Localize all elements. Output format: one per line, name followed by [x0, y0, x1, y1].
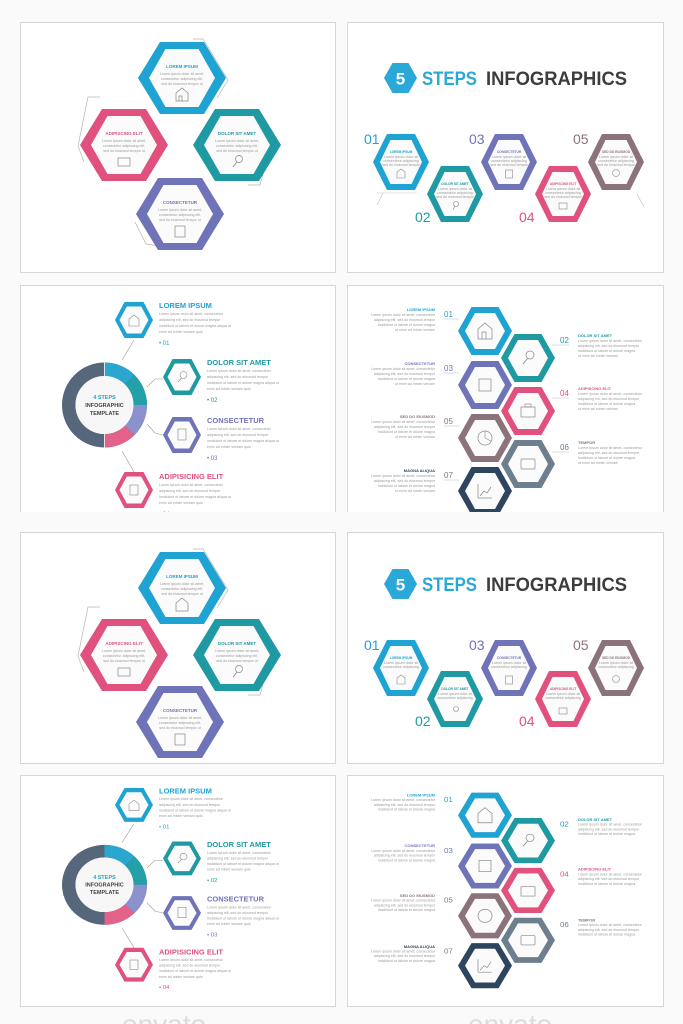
step 05: 05 — [573, 131, 589, 147]
step 06: Lorem ipsum dolor sit amet, consectetur — [578, 923, 643, 927]
step 04: 04 — [519, 209, 535, 225]
step 04 adipiscing elit: • 04 — [159, 512, 170, 518]
step 01: Lorem ipsum dolor sit — [384, 661, 418, 665]
step 05: Lorem ipsum dolor sit amet, consectetur — [371, 899, 436, 903]
title: STEPS — [422, 69, 477, 90]
step 02: Lorem ipsum dolor sit amet, consectetur — [578, 339, 643, 343]
step 06: Lorem ipsum dolor sit amet, consectetur — [578, 446, 643, 450]
step 01: LOREM IPSUM — [407, 793, 435, 797]
title: 5 — [396, 70, 405, 88]
title: 5 — [396, 576, 405, 594]
step 02: 02 — [415, 713, 431, 729]
step 01 — [364, 131, 429, 190]
step 05: Lorem ipsum dolor sit — [599, 661, 633, 665]
step 04 — [519, 166, 591, 225]
step 04: incididunt ut labore et dolore magna aliqua ut — [159, 969, 231, 973]
panel: 7 steps vertical hexagons (row 2 right) — [348, 286, 664, 526]
hex: lorem ipsum: consectetur adipiscing elit, — [161, 587, 203, 591]
step 02: 02 — [560, 820, 569, 828]
hex: adipiscing elit (left) — [80, 109, 168, 181]
step 03: 03 — [444, 364, 453, 373]
step 04: Lorem ipsum dolor sit amet, consectetur — [578, 392, 643, 396]
step 05: consectetur adipiscing — [598, 159, 634, 163]
step 01: adipiscing elit, sed do eiusmod tempor — [374, 318, 436, 322]
hex: adipiscing elit: Lorem ipsum dolor sit amet, — [102, 649, 146, 653]
step 07 — [371, 467, 512, 515]
step 01 lorem ipsum: adipiscing elit, sed do eiusmod tempor — [159, 318, 221, 322]
step 01 — [371, 307, 512, 355]
step 03: sed do eiusmod tempor — [490, 163, 529, 167]
step 02: Lorem ipsum dolor sit amet, consectetur — [578, 823, 643, 827]
step 01: consectetur adipiscing — [383, 665, 419, 669]
step 07: 07 — [444, 947, 453, 955]
step 07: 07 — [444, 471, 453, 480]
step 03: Lorem ipsum dolor sit — [492, 155, 526, 159]
step 01: incididunt ut labore et dolore magna — [378, 808, 435, 812]
step 03 consectetur: enim ad minim veniam quis — [207, 445, 251, 449]
step 05: Lorem ipsum dolor sit amet, consectetur — [371, 420, 436, 424]
step 04: ADIPISCING ELIT — [550, 687, 576, 691]
step 04 adipiscing elit — [115, 472, 231, 518]
step 02: • 02 — [207, 878, 217, 884]
step 05 — [573, 131, 644, 190]
step 03 consectetur — [163, 416, 279, 462]
step 05: SED DO EIUSMOD — [400, 414, 435, 419]
step 02: consectetur adipiscing — [437, 191, 473, 195]
step 03: CONSECTETUR — [207, 895, 265, 904]
step 03 consectetur: incididunt ut labore et dolore magna aliqua ut — [207, 439, 279, 443]
hex: lorem ipsum (top): consectetur adipiscing elit, — [161, 77, 203, 81]
hex: consectetur: Lorem ipsum dolor sit amet, — [158, 716, 202, 720]
hex: lorem ipsum (top): Lorem ipsum dolor sit amet, — [160, 72, 204, 76]
step 01 lorem ipsum: Lorem ipsum dolor sit amet, consectetur — [159, 312, 224, 316]
step 05: SED DO EIUSMOD — [602, 150, 631, 154]
step 01 lorem ipsum: • 01 — [159, 341, 170, 347]
step 03 — [163, 895, 279, 938]
step 03: consectetur adipiscing — [491, 159, 527, 163]
step 02: Lorem ipsum dolor sit — [438, 692, 472, 696]
step 01: 01 — [364, 637, 380, 653]
step 04: 04 — [519, 713, 535, 729]
step 01: Lorem ipsum dolor sit amet, consectetur — [371, 313, 436, 317]
step 02 — [501, 333, 643, 382]
step 04: Lorem ipsum dolor sit — [546, 187, 580, 191]
step 06: adipiscing elit, sed do eiusmod tempor — [578, 928, 640, 932]
hex: dolor sit amet: consectetur adipiscing elit, — [216, 654, 258, 658]
step 01: consectetur adipiscing — [383, 159, 419, 163]
hex: adipiscing elit (left): consectetur adipiscing elit, — [103, 144, 145, 148]
step 03: CONSECTETUR — [497, 656, 522, 660]
step 03: Lorem ipsum dolor sit amet, consectetur — [371, 849, 436, 853]
panel: 5 steps infographics (row 3 right) — [348, 532, 664, 764]
title: INFOGRAPHICS — [486, 69, 627, 90]
step 03: 03 — [469, 637, 485, 653]
hex: consectetur (bottom) — [136, 178, 224, 250]
step 06: adipiscing elit, sed do eiusmod tempor — [578, 451, 640, 455]
step 04: Lorem ipsum dolor sit amet, consectetur — [159, 958, 224, 962]
step 04: consectetur adipiscing — [545, 696, 581, 700]
step 07: adipiscing elit, sed do eiusmod tempor — [374, 954, 436, 958]
step 02: DOLOR SIT AMET — [207, 840, 271, 849]
step 04: 04 — [560, 389, 569, 398]
step 06: 06 — [560, 920, 569, 929]
step 02: incididunt ut labore et dolore magna aliqua ut — [207, 862, 279, 866]
hex: lorem ipsum: Lorem ipsum dolor sit amet, — [160, 582, 204, 586]
hex: consectetur: sed do eiusmod tempor ut — [159, 726, 201, 730]
step 04 adipiscing elit: Lorem ipsum dolor sit amet, consectetur — [159, 483, 224, 487]
step 03 — [469, 131, 537, 190]
step 02: 02 — [415, 209, 431, 225]
step 01 lorem ipsum: incididunt ut labore et dolore magna aliqua ut — [159, 324, 231, 328]
step 04: consectetur adipiscing — [545, 191, 581, 195]
hex: lorem ipsum: LOREM IPSUM — [166, 574, 198, 579]
title — [384, 63, 627, 93]
step 04: adipiscing elit, sed do eiusmod tempor — [578, 397, 640, 401]
step 07: Lorem ipsum dolor sit amet, consectetur — [371, 950, 436, 953]
step 03 — [469, 637, 537, 696]
ring chart — [69, 362, 140, 448]
step 04: enim ad minim veniam quis — [159, 975, 203, 979]
step 07: incididunt ut labore et dolore magna — [378, 484, 435, 488]
step 04: ADIPISCING ELIT — [550, 182, 576, 186]
step 06 — [501, 918, 643, 963]
hex: consectetur (bottom): Lorem ipsum dolor sit amet, — [158, 208, 202, 212]
step 03: adipiscing elit, sed do eiusmod tempor — [374, 372, 436, 376]
step 04 — [501, 386, 643, 435]
step 03: adipiscing elit, sed do eiusmod tempor — [207, 911, 269, 915]
step 04 adipiscing elit: ADIPISICING ELIT — [159, 472, 224, 481]
step 03: consectetur adipiscing — [491, 665, 527, 669]
step 04: Lorem ipsum dolor sit amet, consectetur — [578, 872, 643, 876]
step 02: incididunt ut labore et dolore magna — [578, 349, 635, 353]
title: INFOGRAPHICS — [486, 575, 627, 596]
step 06: incididunt ut labore et dolore magna — [578, 456, 635, 460]
step 02: DOLOR SIT AMET — [441, 687, 469, 691]
title — [384, 569, 627, 599]
step 01: LOREM IPSUM — [159, 787, 212, 796]
step 01: LOREM IPSUM — [407, 307, 436, 312]
hex: consectetur (bottom): sed do eiusmod tempor ut — [159, 218, 201, 222]
step 01 lorem ipsum: enim ad minim veniam quis — [159, 330, 203, 334]
step 02: Lorem ipsum dolor sit — [438, 187, 472, 191]
step 05: 05 — [444, 896, 453, 905]
step 01: sed do eiusmod tempor — [382, 163, 421, 167]
step 04 — [115, 948, 231, 991]
ring chart: TEMPLATE — [90, 411, 119, 417]
hex: dolor sit amet: Lorem ipsum dolor sit amet, — [215, 649, 259, 653]
step 03: Lorem ipsum dolor sit — [492, 661, 526, 665]
step 05: incididunt ut labore et dolore magna — [378, 430, 435, 434]
step 06: ut enim ad minim veniam — [578, 461, 618, 465]
hex: adipiscing elit (left): Lorem ipsum dolor sit amet, — [102, 139, 146, 143]
step 06: TEMPOR — [578, 440, 595, 445]
step 03: ut enim ad minim veniam — [395, 382, 435, 386]
step 01: incididunt ut labore et dolore magna aliqua ut — [159, 809, 231, 812]
step 04 — [501, 867, 643, 913]
hex: dolor sit amet (right): consectetur adipiscing elit, — [216, 144, 258, 148]
hex: lorem ipsum (top): sed do eiusmod tempor ut — [161, 82, 203, 86]
step 04 adipiscing elit: enim ad minim veniam quis — [159, 501, 203, 505]
step 02 — [415, 671, 483, 729]
step 03: CONSECTETUR — [405, 361, 435, 366]
step 02: DOLOR SIT AMET — [441, 182, 469, 186]
step 01: ut enim ad minim veniam — [395, 328, 435, 332]
step 03 — [371, 361, 512, 409]
step 05: Lorem ipsum dolor sit — [599, 155, 633, 159]
ring chart: INFOGRAPHIC — [85, 403, 124, 409]
step 04: incididunt ut labore et dolore magna — [578, 402, 635, 406]
step 02 — [415, 166, 483, 225]
ring chart: INFOGRAPHIC — [85, 883, 124, 889]
step 02 dolor sit amet — [163, 358, 279, 404]
step 05: SED DO EIUSMOD — [602, 656, 631, 660]
step 04: sed do eiusmod tempor — [544, 195, 583, 199]
step 02: consectetur adipiscing — [437, 696, 473, 700]
step 05 — [371, 893, 512, 938]
step 04: Lorem ipsum dolor sit — [546, 692, 580, 696]
step 03 consectetur: • 03 — [207, 456, 218, 462]
step 02: enim ad minim veniam quis — [207, 868, 251, 872]
step 07: ut enim ad minim veniam — [395, 489, 435, 493]
hex: adipiscing elit — [80, 619, 168, 691]
hex: consectetur: CONSECTETUR — [163, 708, 198, 713]
step 04: ADIPISCING ELIT — [578, 867, 612, 872]
hex: lorem ipsum: sed do eiusmod tempor ut — [161, 592, 203, 596]
step 02: ut enim ad minim veniam — [578, 354, 618, 358]
hex: dolor sit amet (right): DOLOR SIT AMET — [218, 131, 256, 136]
step 03: Lorem ipsum dolor sit amet, consectetur — [207, 905, 272, 909]
hex: lorem ipsum (top): LOREM IPSUM — [166, 64, 198, 69]
step 04 adipiscing elit: incididunt ut labore et dolore magna aliqua ut — [159, 495, 231, 499]
step 01: LOREM IPSUM — [390, 150, 413, 154]
hex: dolor sit amet — [193, 619, 281, 691]
step 03: incididunt ut labore et dolore magna aliqua ut — [207, 917, 279, 921]
hex: adipiscing elit: consectetur adipiscing elit, — [103, 654, 145, 658]
step 01: Lorem ipsum dolor sit — [384, 155, 418, 159]
panel: 7 steps vertical hexagons (row 4 right) — [348, 776, 664, 1006]
step 02 dolor sit amet: DOLOR SIT AMET — [207, 358, 271, 367]
hex: lorem ipsum — [138, 552, 226, 624]
step 02 dolor sit amet: • 02 — [207, 398, 218, 404]
panel: 4 hexagons cluster (row 3 left) — [20, 532, 336, 764]
step 01: LOREM IPSUM — [390, 656, 413, 660]
step 03: 03 — [469, 131, 485, 147]
step 05: adipiscing elit, sed do eiusmod tempor — [374, 904, 436, 907]
hex: dolor sit amet (right): sed do eiusmod tempor ut — [216, 149, 258, 153]
step 05: 05 — [573, 637, 589, 653]
ring chart: 4 STEPS — [93, 875, 116, 881]
title: STEPS — [422, 575, 477, 596]
ring chart — [69, 851, 140, 918]
panel: 4 steps ring template (row 2 left) — [20, 286, 336, 526]
step 06: 06 — [560, 443, 569, 452]
step 02: DOLOR SIT AMET — [578, 817, 613, 822]
step 02 dolor sit amet: incididunt ut labore et dolore magna aliqua ut — [207, 381, 279, 385]
step 04 adipiscing elit: adipiscing elit, sed do eiusmod tempor — [159, 489, 221, 493]
step 03: enim ad minim veniam quis — [207, 922, 251, 926]
step 01 — [364, 637, 429, 696]
step 07: MAGNA ALIQUA — [404, 944, 435, 949]
hex: dolor sit amet (right): Lorem ipsum dolor sit amet, — [215, 139, 259, 143]
step 03: Lorem ipsum dolor sit amet, consectetur — [371, 367, 436, 371]
step 05 — [573, 637, 644, 696]
hex: lorem ipsum (top) — [138, 42, 226, 114]
step 04: ADIPISICING ELIT — [159, 948, 224, 956]
step 03: 03 — [444, 846, 453, 855]
step 07: incididunt ut labore et dolore magna — [378, 959, 435, 963]
hex: adipiscing elit: ADIPISCING ELIT — [105, 641, 143, 646]
step 04: adipiscing elit, sed do eiusmod tempor — [578, 877, 640, 881]
step 02: sed do eiusmod tempor — [436, 195, 475, 199]
step 01 — [115, 787, 231, 830]
step 05: ut enim ad minim veniam — [395, 435, 435, 439]
step 03 consectetur: adipiscing elit, sed do eiusmod tempor — [207, 433, 269, 437]
step 02: adipiscing elit, sed do eiusmod tempor — [578, 344, 640, 348]
hex: adipiscing elit (left): ADIPISCING ELIT — [105, 131, 143, 136]
step 02 dolor sit amet: enim ad minim veniam quis — [207, 387, 251, 391]
hex: consectetur: consectetur adipiscing elit, — [159, 721, 201, 725]
step 05: consectetur adipiscing — [598, 665, 634, 669]
step 02 — [163, 840, 279, 884]
step 03 consectetur: CONSECTETUR — [207, 416, 265, 425]
step 05 — [371, 414, 512, 462]
step 04: 04 — [560, 870, 570, 878]
step 02 dolor sit amet: adipiscing elit, sed do eiusmod tempor — [207, 375, 269, 379]
step 02: 02 — [560, 336, 569, 345]
step 03 — [371, 843, 512, 889]
step 03: incididunt ut labore et dolore magna — [378, 858, 435, 862]
step 07 — [371, 943, 512, 988]
step 03: • 03 — [207, 933, 217, 938]
step 01: enim ad minim veniam quis — [159, 814, 203, 818]
step 01: Lorem ipsum dolor sit amet, consectetur — [371, 798, 436, 802]
step 02: DOLOR SIT AMET — [578, 333, 613, 338]
step 02: adipiscing elit, sed do eiusmod tempor — [207, 857, 269, 860]
step 04 — [519, 671, 591, 729]
step 03: CONSECTETUR — [405, 843, 435, 848]
connectors — [122, 340, 134, 360]
step 04: • 04 — [159, 985, 170, 991]
step 03: CONSECTETUR — [497, 150, 522, 154]
step 01 lorem ipsum: LOREM IPSUM — [159, 301, 212, 310]
hex: dolor sit amet: DOLOR SIT AMET — [218, 641, 256, 646]
hex: adipiscing elit: sed do eiusmod tempor ut — [103, 659, 145, 663]
step 01 — [371, 793, 512, 838]
step 05: adipiscing elit, sed do eiusmod tempor — [374, 425, 436, 429]
step 01: adipiscing elit, sed do eiusmod tempor — [159, 803, 221, 807]
step 04: ut enim ad minim veniam — [578, 407, 618, 411]
step 03 consectetur: Lorem ipsum dolor sit amet, consectetur — [207, 427, 272, 431]
step 01 lorem ipsum — [115, 301, 231, 347]
ring chart: TEMPLATE — [90, 890, 120, 896]
step 01: 01 — [444, 795, 453, 804]
hex: consectetur (bottom): consectetur adipiscing elit, — [159, 213, 201, 217]
step 01: 01 — [364, 131, 380, 147]
panel: 5 steps infographics (row 1 right) — [348, 22, 664, 272]
panel: 4 steps ring template (row 4 left) — [20, 776, 336, 1006]
step 02: incididunt ut labore et dolore magna — [578, 832, 635, 836]
step 05: incididunt ut labore et dolore magna — [378, 908, 435, 912]
step 07: Lorem ipsum dolor sit amet, consectetur — [371, 474, 436, 478]
step 01: adipiscing elit, sed do eiusmod tempor — [374, 803, 436, 807]
step 02: Lorem ipsum dolor sit amet, consectetur — [207, 851, 272, 855]
step 01: • 01 — [159, 825, 169, 830]
step 04: adipiscing elit, sed do eiusmod tempor — [159, 964, 221, 968]
panel: 4 hexagons cluster (row 1 left) — [20, 22, 336, 272]
step 04: incididunt ut labore et dolore magna — [578, 882, 635, 886]
hex: adipiscing elit (left): sed do eiusmod tempor ut — [103, 149, 145, 153]
step 03: incididunt ut labore et dolore magna — [378, 377, 435, 381]
hex: dolor sit amet: sed do eiusmod tempor ut — [216, 659, 258, 663]
step 07: MAGNA ALIQUA — [404, 468, 435, 473]
hex: dolor sit amet (right) — [193, 109, 281, 181]
ring chart: 4 STEPS — [93, 395, 116, 401]
step 01: Lorem ipsum dolor sit amet, consectetur — [159, 797, 224, 801]
step 05: SED DO EIUSMOD — [400, 893, 435, 898]
step 04: ADIPISCING ELIT — [578, 386, 612, 391]
step 06 — [501, 440, 643, 488]
step 07: adipiscing elit, sed do eiusmod tempor — [374, 479, 436, 483]
step 05: sed do eiusmod tempor — [597, 163, 636, 167]
step 02 dolor sit amet: Lorem ipsum dolor sit amet, consectetur — [207, 369, 272, 373]
hex: consectetur (bottom): CONSECTETUR — [163, 200, 198, 205]
step 05: 05 — [444, 417, 453, 426]
step 03: adipiscing elit, sed do eiusmod tempor — [374, 854, 436, 858]
step 01: 01 — [444, 310, 453, 319]
step 06: TEMPOR — [578, 918, 595, 922]
step 02: adipiscing elit, sed do eiusmod tempor — [578, 827, 640, 831]
gap band between row 2 and row 3 — [0, 512, 683, 531]
step 06: incididunt ut labore et dolore magna — [578, 933, 635, 937]
hex: consectetur — [136, 686, 224, 758]
step 01: incididunt ut labore et dolore magna — [378, 323, 435, 327]
step 02 — [501, 817, 643, 863]
